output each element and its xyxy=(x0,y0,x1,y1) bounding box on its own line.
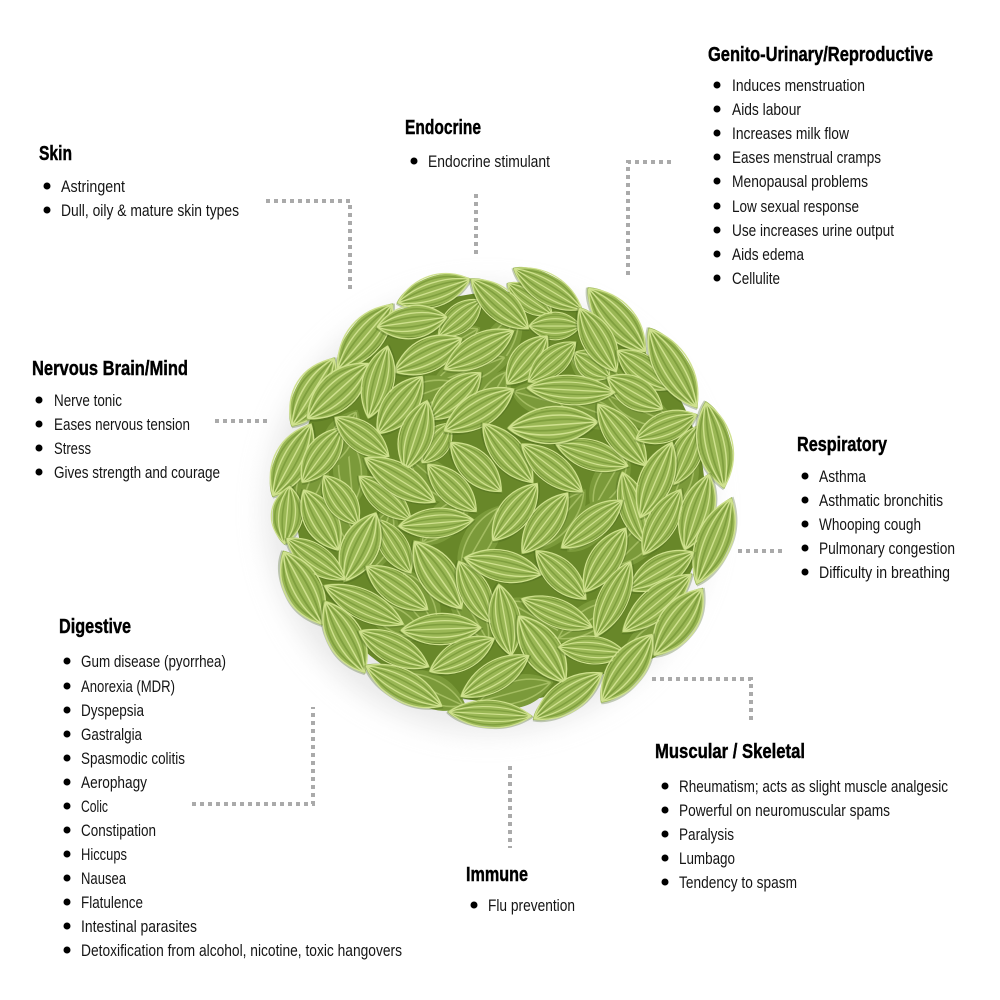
panel: respiratory: Difficulty in breathing xyxy=(819,564,950,582)
panel: digestive: Anorexia (MDR) xyxy=(81,678,175,696)
panel: immune xyxy=(466,864,575,915)
panel: digestive xyxy=(59,616,402,960)
panel: skin xyxy=(39,143,239,220)
panel: genito-urinary / reproductive: Induces menstruation xyxy=(732,77,865,95)
panel: genito-urinary / reproductive: Increases milk flow xyxy=(732,125,849,143)
panel: respiratory xyxy=(797,434,955,582)
panel: digestive: Aerophagy xyxy=(81,774,148,792)
panel: digestive: Gum disease (pyorrhea) xyxy=(81,653,226,671)
heading: digestive: Digestive xyxy=(59,616,131,638)
panel: nervous brain / mind xyxy=(32,358,220,482)
panel: digestive: Detoxification from alcohol, nicotine, toxic hangovers xyxy=(81,942,402,960)
panel: digestive: Colic xyxy=(81,798,108,816)
panel: digestive: Hiccups xyxy=(81,846,127,864)
panel: skin: Astringent xyxy=(61,178,125,196)
heading: nervous: Nervous Brain/Mind xyxy=(32,358,188,380)
panel: respiratory: Whooping cough xyxy=(819,516,921,534)
panel: muscular / skeletal: Lumbago xyxy=(679,850,735,868)
connector: muscular xyxy=(652,679,751,720)
heading: endocrine: Endocrine xyxy=(405,117,481,139)
panel: genito-urinary / reproductive: Aids edema xyxy=(732,246,805,264)
panel: digestive: Gastralgia xyxy=(81,726,143,744)
panel: muscular / skeletal xyxy=(655,741,948,892)
panel: muscular / skeletal: Paralysis xyxy=(679,826,734,844)
fennel seed pile xyxy=(256,255,750,734)
panel: digestive: Constipation xyxy=(81,822,156,840)
connector: immune xyxy=(508,766,512,848)
panel: nervous brain / mind: Eases nervous tension xyxy=(54,416,190,434)
heading: muscular: Muscular / Skeletal xyxy=(655,741,805,763)
panel: nervous brain / mind: Stress xyxy=(54,440,91,458)
connector: nervous xyxy=(215,419,267,423)
panel: genito-urinary / reproductive: Aids labour xyxy=(732,101,801,119)
heading: skin: Skin xyxy=(39,143,72,165)
panel: respiratory: Pulmonary congestion xyxy=(819,540,955,558)
panel: muscular / skeletal: Tendency to spasm xyxy=(679,874,797,892)
panel: skin: Dull, oily & mature skin types xyxy=(61,202,239,220)
panel: genito-urinary / reproductive: Menopausal problems xyxy=(732,173,868,191)
panel: genito-urinary / reproductive xyxy=(708,44,933,288)
panel: genito-urinary / reproductive: Eases menstrual cramps xyxy=(732,149,881,167)
heading: respiratory: Respiratory xyxy=(797,434,888,456)
connector: endocrine xyxy=(474,194,478,254)
panel: digestive: Nausea xyxy=(81,870,127,888)
panel: immune: Flu prevention xyxy=(488,897,575,915)
panel: genito-urinary / reproductive: Low sexual response xyxy=(732,198,859,216)
panel: respiratory: Asthma xyxy=(819,468,867,486)
connector: skin xyxy=(266,201,350,290)
panel: genito-urinary / reproductive: Use increases urine output xyxy=(732,222,894,240)
panel: nervous brain / mind: Gives strength and courage xyxy=(54,464,220,482)
panel: endocrine: Endocrine stimulant xyxy=(428,153,550,171)
panel: digestive: Flatulence xyxy=(81,894,143,912)
heading: immune: Immune xyxy=(466,864,528,886)
connector: respiratory xyxy=(738,549,782,553)
heading: genito-urinary: Genito-Urinary/Reproductive xyxy=(708,44,933,66)
panel: digestive: Dyspepsia xyxy=(81,702,145,720)
panel: genito-urinary / reproductive: Cellulite xyxy=(732,270,780,288)
panel: digestive: Intestinal parasites xyxy=(81,918,197,936)
panel: respiratory: Asthmatic bronchitis xyxy=(819,492,943,510)
soft shadow beneath seed pile xyxy=(266,288,710,732)
connector: genito-urinary xyxy=(628,162,671,276)
panel: muscular / skeletal: Powerful on neuromuscular spams xyxy=(679,802,890,820)
connector: digestive xyxy=(192,707,313,804)
panel: muscular / skeletal: Rheumatism; acts as slight muscle analgesic xyxy=(679,778,948,796)
panel: endocrine xyxy=(405,117,550,171)
panel: digestive: Spasmodic colitis xyxy=(81,750,185,768)
panel: nervous brain / mind: Nerve tonic xyxy=(54,392,122,410)
